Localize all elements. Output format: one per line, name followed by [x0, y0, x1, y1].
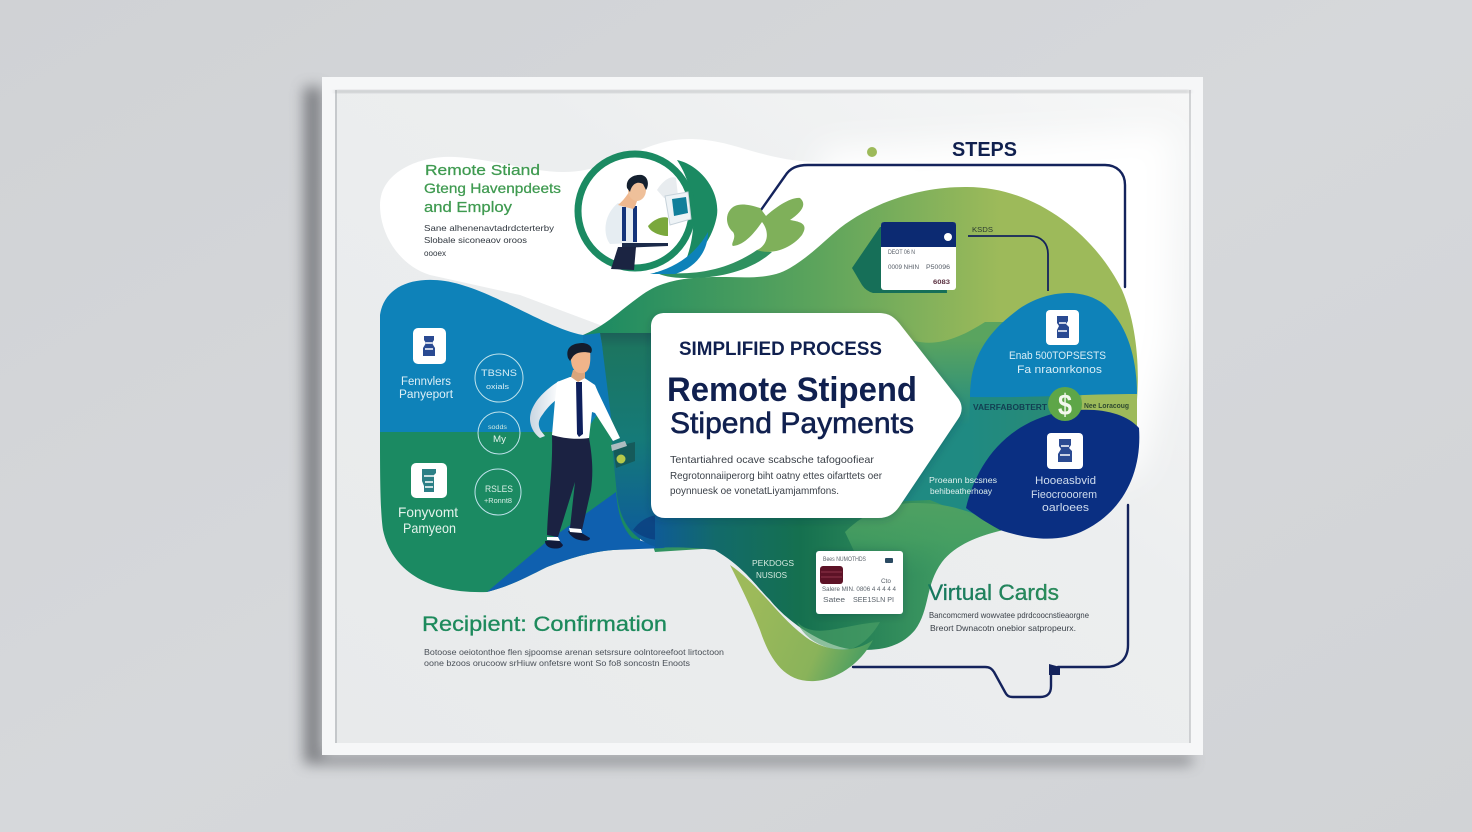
body: Breort Dwnacotn onebior satpropeurx.: [930, 623, 1076, 633]
body: [424, 223, 555, 258]
label: card tag: KSDS: [972, 225, 993, 234]
virtual card: bottom: Salere MIN. 0806 4 4 4 4 4: [822, 587, 897, 593]
virtual card: top right: P50096: [926, 265, 951, 271]
fold: [797, 622, 880, 650]
label: lower left: Pamyeon: [403, 520, 456, 536]
label: lower left: [398, 504, 458, 536]
label: lower card tag: [752, 558, 794, 580]
body: [424, 647, 724, 668]
virtual card: top right: DEOT 06 N: [888, 250, 915, 256]
teal band: [967, 394, 1137, 528]
panel: central title card: Stipend Payments: [670, 407, 914, 440]
blue lobe: [970, 293, 1137, 397]
body: oone bzoos orucoow srHiuw onfetsre wont So fo8 soncostn Enoots: [424, 658, 690, 668]
neck: [618, 192, 638, 209]
callout one: [475, 354, 523, 402]
shirt: [605, 203, 637, 244]
illustration: leaf swoosh: [655, 198, 805, 278]
face: [628, 179, 646, 201]
white background blob: [380, 139, 1000, 400]
label: beside navy lobe: behibeatherhoay: [930, 487, 992, 496]
ring: [578, 154, 692, 268]
callout three: RSLES: [485, 484, 513, 495]
doorway: [600, 333, 660, 548]
label: right upper: Fa nraonrkonos: [1017, 364, 1103, 376]
callout three: +Ronnt8: [484, 498, 512, 505]
callout one: oxials: [486, 382, 509, 391]
card body: Tentartiahred ocave scabsche tafogoofiear: [670, 454, 875, 466]
body: Slobale siconeaov oroos: [424, 235, 527, 245]
green crescent: [677, 160, 717, 262]
illustration: standing man with bag: [530, 343, 635, 549]
main title: Remote Stipend: [667, 371, 917, 409]
body: Bancomcmerd wowvatee pdrdcoocnstieaorgne: [929, 610, 1089, 620]
panel: central title card: [651, 313, 962, 518]
label: right lower: [1031, 475, 1097, 514]
tie: [576, 382, 583, 437]
virtual card: bottom: Bees NUMOTHDS: [823, 557, 866, 563]
navy lobe: [966, 410, 1139, 539]
connector line: steps loop: [761, 165, 1128, 697]
poster frame: [304, 77, 1203, 764]
heading: Virtual Cards: [928, 580, 1059, 605]
bag: [613, 442, 635, 468]
callout two: [478, 412, 520, 454]
callout one: TBSNS: [481, 368, 517, 378]
hair: [567, 343, 592, 361]
laptop screen: [665, 192, 691, 225]
label: right lower: oarloees: [1042, 502, 1090, 514]
panel: right mid green and teal: [880, 322, 1010, 530]
left arm: [530, 381, 559, 438]
decorative dot: [867, 147, 877, 157]
label: right lower: Fieocrooorem: [1031, 489, 1097, 501]
callout two: My: [493, 434, 507, 444]
floor: [487, 492, 665, 592]
paper: [657, 177, 678, 198]
trousers: [547, 435, 592, 537]
circle callouts: [475, 354, 523, 515]
callout three: [475, 469, 521, 515]
band label left: VAERFABOBTERT: [973, 403, 1047, 412]
virtual card: top right: [852, 222, 956, 293]
virtual card: bottom: Cto: [881, 579, 892, 585]
panel: right lobes: [966, 293, 1139, 539]
virtual card: top right: 0009 NHIN: [888, 265, 919, 271]
hair: [627, 175, 648, 192]
label: beside navy lobe: Proeann bscsnes: [929, 476, 997, 485]
card body: Regrotonnaiiperorg biht oatny ettes oifarttets oer: [670, 470, 882, 482]
right-of-person green wedge: [585, 415, 618, 500]
heading: and Employ: [424, 199, 513, 216]
label: lower left: Fonyvomt: [398, 504, 458, 520]
icon: lower left: [411, 463, 447, 498]
card body: [670, 454, 882, 497]
virtual card: bottom: [816, 551, 903, 614]
main green flowing shape: [583, 187, 1138, 552]
shoes: [545, 539, 563, 549]
illustration: person with laptop in circle: [578, 154, 717, 274]
arch: [845, 503, 1003, 585]
blue crescent: [650, 232, 708, 274]
heading: [424, 162, 561, 216]
label: lower card tag: NUSIOS: [756, 570, 787, 580]
card body: poynnuesk oe vonetatLiyamjammfons.: [670, 485, 839, 497]
body: oooex: [424, 248, 447, 258]
heading: Gteng Havenpdeets: [424, 180, 561, 196]
icon: upper left: [413, 328, 446, 364]
virtual card: bottom: Satee: [823, 597, 845, 604]
green object: [648, 217, 668, 236]
icon: right lower: [1047, 433, 1083, 469]
section: virtual cards: [928, 580, 1089, 633]
band label right: Nee Loracoug: [1084, 401, 1129, 410]
shirt: [552, 377, 620, 441]
braces: [622, 207, 626, 241]
connector line: card to lobe: [968, 236, 1048, 291]
label: right lower: Hooeasbvid: [1035, 475, 1096, 487]
section: recipient confirmation: [422, 613, 724, 668]
label: beside navy lobe: [929, 476, 997, 496]
callout two: sodds: [488, 425, 507, 431]
connector end marker: [1049, 664, 1060, 675]
trousers: [611, 247, 636, 270]
label: upper left: Fennvlers: [401, 376, 451, 388]
label: upper left: [399, 376, 454, 401]
soft white wash, top right: [820, 130, 1172, 500]
heading: steps: STEPS: [952, 139, 1017, 161]
neck: [571, 370, 585, 382]
text block: top left: [424, 162, 561, 258]
body: Sane alhenenavtadrdcterterby: [424, 223, 555, 233]
panel: left blue and green wave: [380, 280, 665, 592]
lime: [730, 565, 873, 681]
icon: dollar badge: $: [1058, 389, 1072, 422]
virtual card: top right: 6083: [933, 280, 951, 286]
laptop base: [622, 243, 668, 248]
label: right upper: [1009, 350, 1106, 376]
label: lower card tag: PEKDOGS: [752, 558, 794, 568]
eyebrow: SIMPLIFIED PROCESS: [679, 339, 882, 360]
icon: right upper: [1046, 310, 1079, 345]
label: upper left: Panyeport: [399, 389, 454, 401]
body: Botoose oeiotonthoe flen sjpoomse arenan setsrsure oolntoreefoot lirtoctoon: [424, 647, 724, 657]
icon: dollar badge: [1048, 387, 1082, 422]
virtual card: bottom: SEE1SLN PI: [853, 597, 894, 604]
label: right upper: Enab 500TOPSESTS: [1009, 350, 1106, 362]
face: [571, 350, 590, 373]
panel: lower green swoosh: [655, 500, 1003, 681]
heading: Remote Stiand: [425, 162, 540, 179]
body: [929, 610, 1089, 633]
heading: Recipient: Confirmation: [422, 613, 667, 636]
